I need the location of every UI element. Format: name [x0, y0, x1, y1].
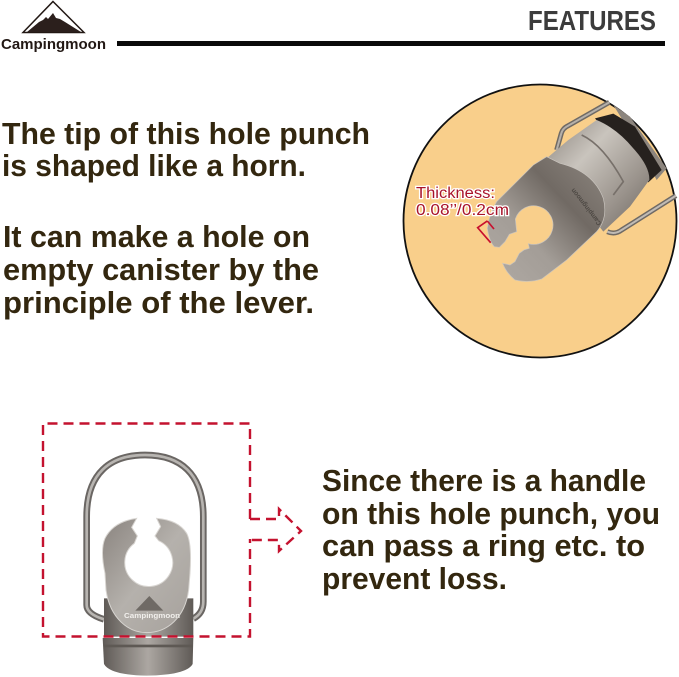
text block: horn-shaped tip [2, 116, 370, 183]
handle loop [87, 455, 203, 619]
text block: handle: prevent loss. [322, 561, 507, 596]
engraved mountain logo [135, 596, 163, 611]
heading: FEATURES: FEATURES [528, 5, 656, 36]
text block: lever principle: It can make a hole on [3, 219, 310, 254]
text block: lever principle [3, 219, 319, 320]
header rule [117, 41, 665, 46]
text block: lever principle: principle of the lever. [3, 285, 314, 320]
far end of barrel [613, 105, 667, 180]
text block: handle: Since there is a handle [322, 463, 646, 498]
handle wire, lower [607, 196, 676, 233]
callout: thickness [416, 185, 509, 219]
callout: thickness: 0.08’’/0.2cm [416, 202, 509, 219]
engraved brand: Campingmoon [124, 611, 181, 620]
text block: horn-shaped tip: is shaped like a horn. [2, 148, 306, 183]
red thickness marker [478, 221, 491, 243]
logo: Campingmoon [1, 2, 106, 53]
callout: thickness: Thickness: [416, 185, 495, 202]
text block: handle: on this hole punch, you [322, 496, 660, 531]
dark ring of barrel [595, 114, 662, 182]
barrel [547, 120, 649, 232]
logo: Campingmoon: Campingmoon [1, 36, 106, 53]
plate and jaws [487, 157, 605, 281]
barrel groove [582, 135, 623, 195]
text block: lever principle: empty canister by the [3, 252, 319, 287]
engraved brand: Campingmoon [570, 187, 603, 226]
text block: handle [322, 463, 660, 596]
base neck [104, 598, 193, 637]
text block: handle: can pass a ring etc. to [322, 528, 645, 563]
text block: horn-shaped tip: The tip of this hole punch [2, 116, 370, 151]
base ring [103, 638, 193, 676]
product photo: punch with handle [87, 455, 203, 676]
plate [102, 518, 191, 633]
panel: circular close-up of tip [404, 84, 676, 358]
handle wire, upper [557, 102, 609, 150]
dashed highlight frame and arrow [43, 424, 301, 636]
